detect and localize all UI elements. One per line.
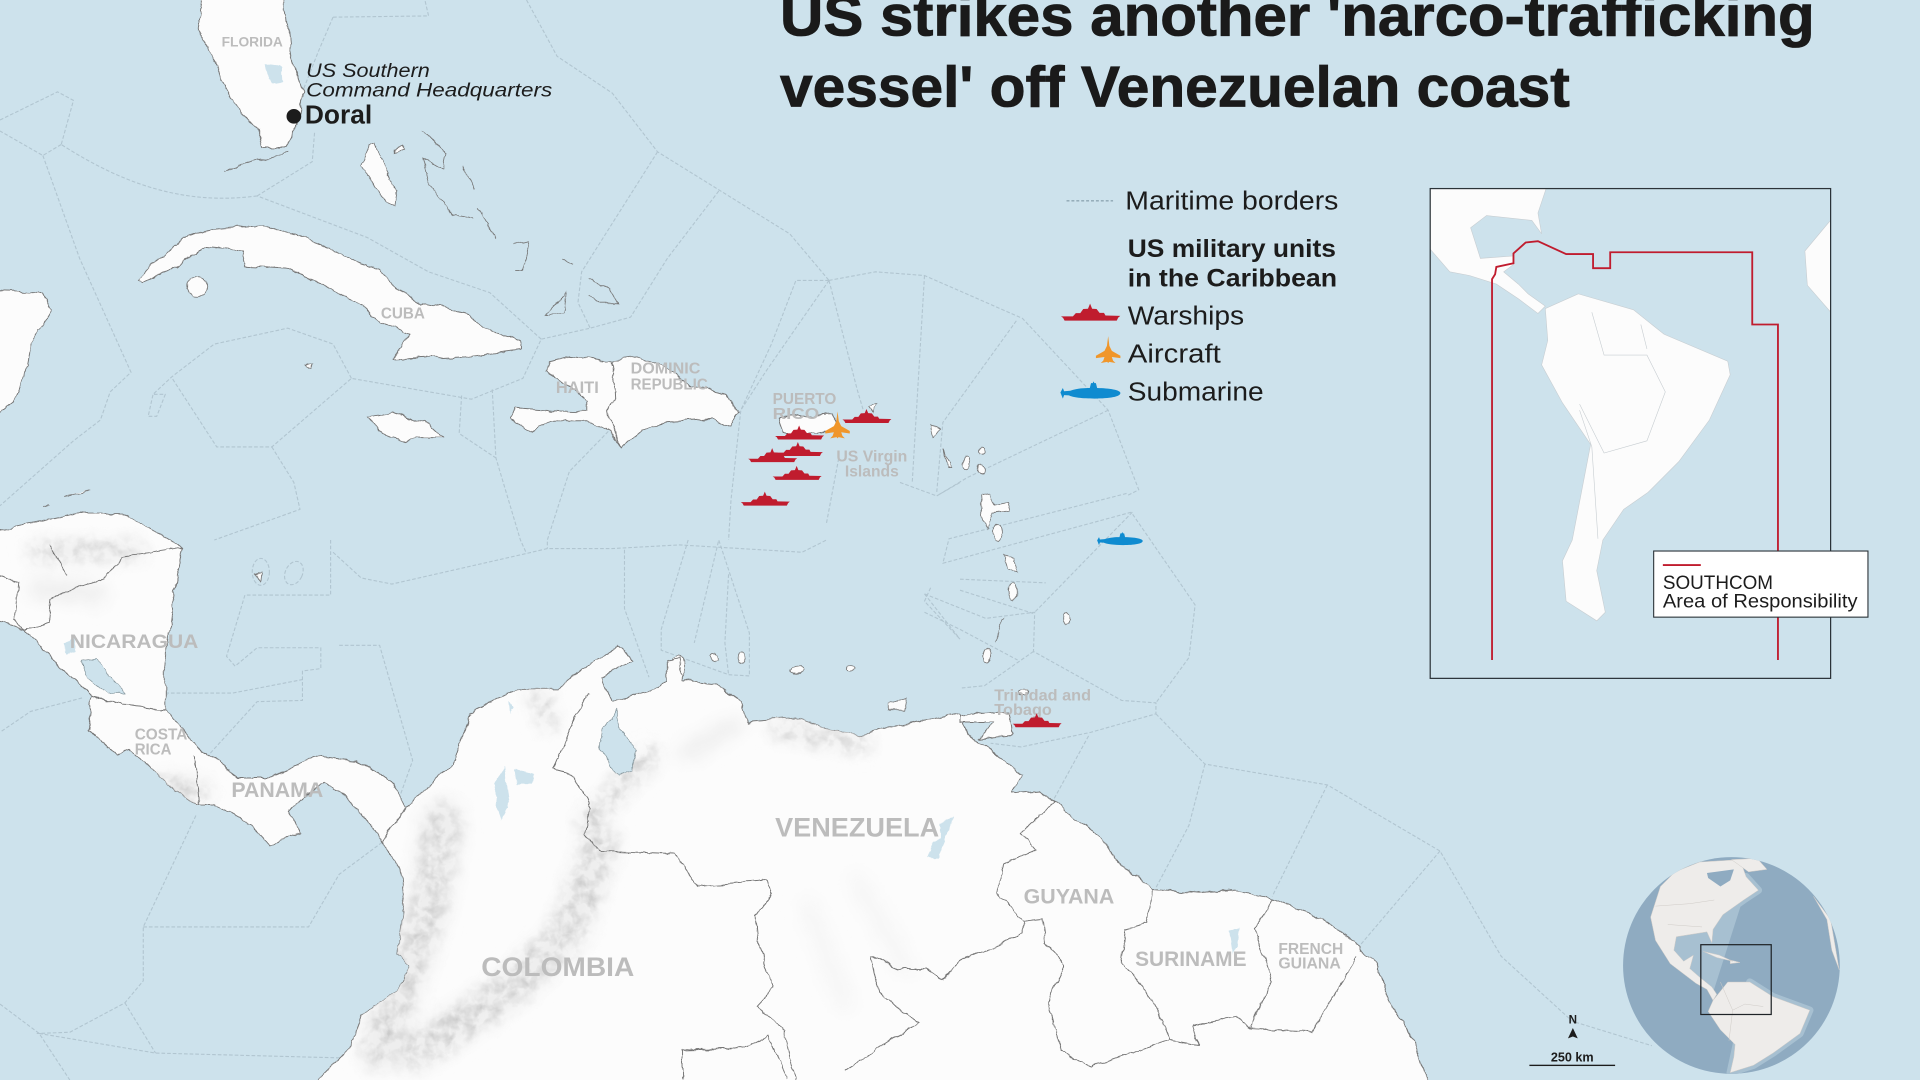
map labels: geography: GUYANA [1024,886,1114,909]
map labels: geography: COSTA [135,727,188,744]
map labels: geography: HAITI [556,378,599,397]
label: US Southern Command Headquarters at Doral [287,60,552,130]
legend: aircraft icon [1096,336,1120,363]
map labels: geography: Tobago [994,702,1052,719]
map labels: geography: GUIANA [1278,956,1341,973]
SOUTHCOM boundary line [1492,241,1778,660]
map labels: geography: REPUBLIC [631,376,708,393]
globe: Hudson Bay [1707,869,1734,887]
legend: units heading: in the Caribbean [1128,265,1337,293]
scale bar [1529,1050,1615,1066]
all land masses [0,0,1428,1080]
land: Yucatan [0,290,51,422]
relief: textured ridges [37,551,863,1053]
north arrow [1568,1014,1578,1038]
inset land [1427,184,1837,621]
label: US Southern Command Headquarters at Doral: Command Headquarters [306,80,552,102]
title [780,0,1815,120]
land: Central and South America [0,513,1428,1080]
legend: submarine icon [1060,381,1120,399]
map labels: geography: RICA [135,741,172,758]
map labels: geography: Trinidad and [994,687,1091,704]
globe: land [1651,858,1839,1073]
map labels: geography: RICO [773,406,819,423]
map labels: geography: CUBA [381,305,425,322]
submarine on map [1097,532,1143,545]
map labels: geography: DOMINIC [631,360,701,377]
label: US Southern Command Headquarters at Doral: Doral [305,102,372,130]
map labels: geography: PANAMA [231,779,323,802]
globe: continental shelf [1674,877,1810,1073]
land: Jamaica [367,413,443,442]
lakes and rivers [64,64,1239,955]
border: Haiti and Dominican Republic [609,361,621,449]
map labels: geography: COLOMBIA [481,952,634,982]
legend: units heading: US military units [1128,235,1336,263]
inset legend box [1654,551,1868,617]
map labels: geography: PUERTO [773,391,836,408]
inset legend box: SOUTHCOM [1663,573,1773,594]
land: Hispaniola [511,356,738,449]
land: Puerto Rico [779,415,841,433]
terrain relief [37,551,906,1053]
land: Trinidad [960,711,1013,738]
aircraft on map [825,411,850,438]
land: Isla de la Juventud [186,277,208,296]
relief: soft shading [37,551,906,1053]
map labels: geography: FLORIDA [222,34,283,50]
legend [1060,187,1338,406]
map labels: geography: NICARAGUA [70,631,198,653]
label: US Southern Command Headquarters at Doral: US Southern [306,60,430,82]
globe area box [1701,945,1771,1014]
map labels: geography: VENEZUELA [775,812,939,842]
legend: units heading [1128,235,1337,293]
legend: submarine text: Submarine [1128,378,1264,406]
inset legend box: Area of Responsibility [1663,591,1858,612]
country borders [0,545,1358,1080]
legend: maritime borders text: Maritime borders [1125,187,1338,215]
map labels: geography: SURINAME [1135,948,1247,971]
locator globe [1623,857,1840,1074]
map labels: geography: US Virgin [836,449,907,466]
map labels: geography: FRENCH [1278,941,1343,958]
land: Bahamas [223,130,618,316]
map labels: geography [70,34,1343,982]
legend: maritime borders key [1067,200,1113,202]
legend: aircraft text: Aircraft [1128,340,1221,368]
land: Cuba [138,225,520,360]
map labels: geography: Islands [845,463,899,480]
inset map: SOUTHCOM area [1427,184,1868,678]
legend: warships text: Warships [1128,302,1244,330]
north arrow: N [1569,1014,1577,1027]
warships on map [741,409,1062,727]
title: vessel' off Venezuelan coast [780,56,1570,120]
land: Florida [198,0,302,147]
legend: warship icon [1061,304,1120,321]
land: Lesser Antilles islands [43,362,1069,710]
scale bar: 250 km [1551,1050,1594,1065]
